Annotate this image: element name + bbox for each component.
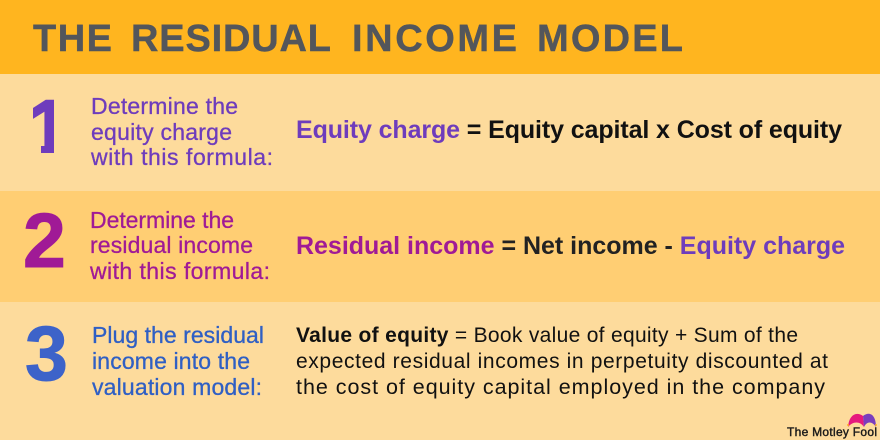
- logo: The Motley Fool: [787, 414, 877, 439]
- step 1 instruction: equity charge: [91, 119, 232, 145]
- step 3 formula: the cost of equity capital employed in the company: [296, 375, 825, 399]
- panel: step 3: [0, 302, 880, 440]
- step 2 instruction: with this formula:: [89, 258, 270, 284]
- step 3 formula: expected residual incomes in perpetuity discounted at: [296, 350, 828, 373]
- logo wordmark: The Motley Fool: [787, 425, 877, 439]
- step 1 number: 1: [27, 83, 71, 172]
- step 3 instruction: [92, 322, 264, 400]
- step 3 instruction: valuation model:: [92, 374, 262, 400]
- step 3 number: 3: [25, 311, 68, 397]
- step 3 formula: [296, 324, 828, 399]
- step 3 instruction: income into the: [92, 348, 250, 374]
- step 3 formula: Value of equity = Book value of equity + Sum of the: [296, 324, 798, 347]
- step 3 instruction: Plug the residual: [92, 322, 264, 348]
- title: THE: [33, 18, 112, 60]
- step 1 formula: Equity charge = Equity capital x Cost of equity: [296, 116, 842, 144]
- step 2 number: 2: [23, 198, 66, 284]
- step 2 instruction: Determine the: [90, 207, 234, 233]
- title: RESIDUAL: [131, 18, 331, 60]
- step 2 instruction: residual income: [90, 232, 253, 258]
- icon: jester hat: [847, 414, 877, 427]
- step 1 instruction: with this formula:: [90, 144, 273, 170]
- header band: [0, 0, 880, 74]
- step 1 instruction: [90, 93, 273, 170]
- panel: step 1: [33, 96, 842, 166]
- step 1 instruction: Determine the: [91, 93, 238, 119]
- step 2 formula: Residual income = Net income - Equity charge: [296, 232, 845, 260]
- step 2 instruction: [89, 207, 270, 284]
- title: [33, 18, 683, 60]
- title: MODEL: [537, 18, 683, 60]
- title: INCOME: [352, 18, 517, 60]
- panel: step 2: [0, 191, 880, 302]
